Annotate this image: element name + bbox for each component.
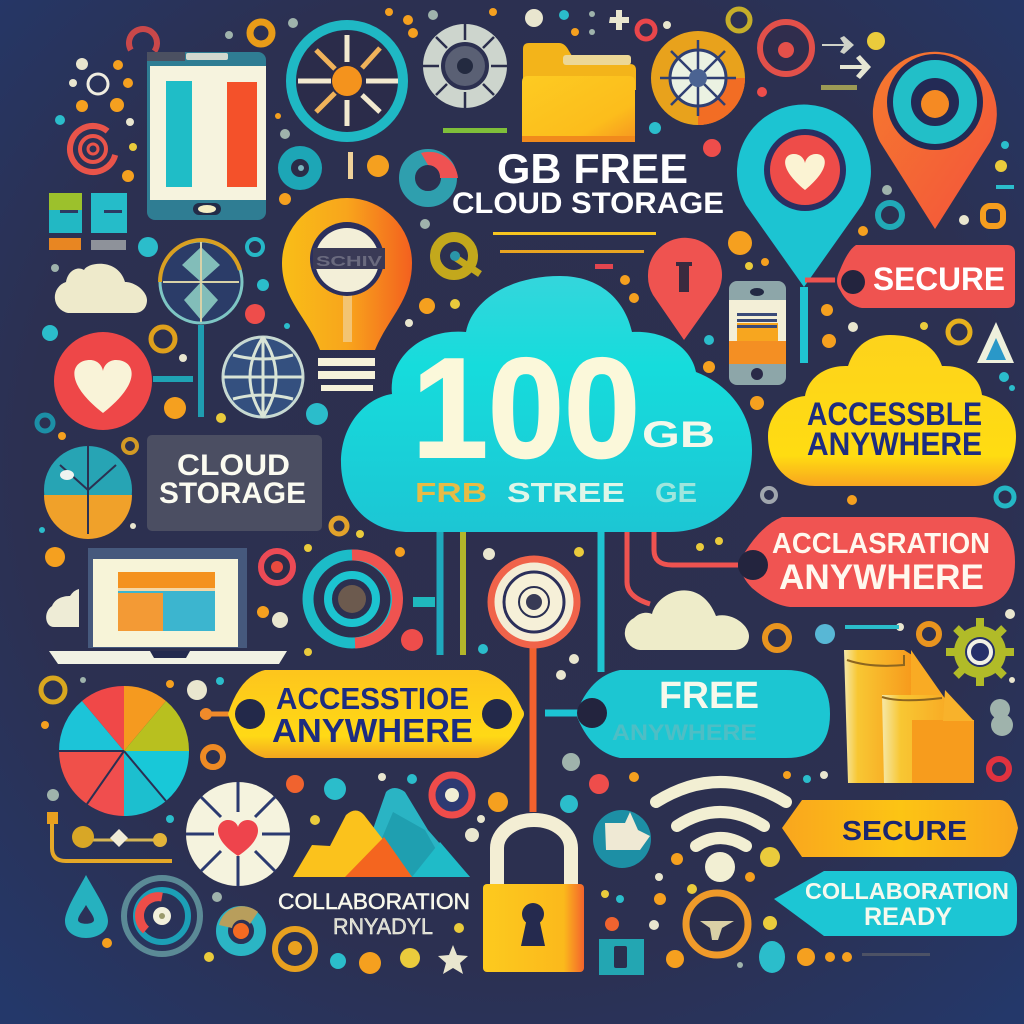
connector lines below main cloud (440, 530, 738, 812)
icon: tablet (147, 52, 266, 220)
icon: wheel globe on stem (160, 240, 242, 417)
main cloud: 100 GB free storage (341, 276, 752, 532)
heading (452, 145, 724, 220)
callout cloud: accessible anywhere: ANYWHERE (807, 426, 982, 462)
tag: collaboration ready: COLLABORATION (805, 878, 1009, 904)
icon: olive key (435, 237, 480, 275)
icon: mini pie ring (407, 152, 458, 199)
icon: red white target (491, 559, 577, 645)
icon: smartphone (729, 281, 786, 385)
icon: compass (660, 40, 736, 116)
main cloud: 100 GB free storage: FRB (415, 477, 487, 508)
icon: teal map pin with heart (737, 105, 871, 363)
icon: orange map pin (873, 52, 997, 229)
icon: spiral at-sign (65, 121, 121, 177)
main cloud: 100 GB free storage: GB (642, 414, 715, 455)
tag: accesstioe anywhere: ANYWHERE (272, 712, 473, 749)
tag: accesstioe anywhere (200, 670, 524, 758)
tag: free: FREE (659, 675, 759, 717)
main cloud: 100 GB free storage: STREE (507, 477, 625, 508)
icon: grey segmented wheel (423, 24, 507, 108)
text: collaboration rnyadyl (278, 889, 470, 939)
callout cloud: accessible anywhere (768, 335, 1016, 486)
icon: connector with nodes (47, 812, 172, 861)
icon: orange ring with dot (275, 929, 315, 969)
callout cloud: accessible anywhere: ACCESSBLE (807, 396, 982, 432)
icon: teal thumbs-up circle (593, 810, 651, 868)
icon: teal ring sun wheel (291, 25, 403, 137)
tag: secure red: SECURE (873, 261, 1005, 297)
tag: secure yellow: SECURE (842, 815, 967, 846)
icon: cream cloud left (55, 264, 147, 313)
icon: concentric ring (124, 878, 200, 954)
icon: cream cloud right (625, 590, 749, 650)
icon: teal red donut target (308, 555, 397, 643)
icon: orange badge ring (686, 893, 748, 955)
tag: collaboration ready: READY (864, 903, 952, 931)
tag: free: ANYWHERE (612, 720, 757, 745)
icon: tent triangle (977, 322, 1014, 363)
main cloud: 100 GB free storage: GE (655, 477, 697, 508)
icon: half cloud (46, 589, 79, 627)
tag: acclasration anywhere: ANYWHERE (779, 558, 984, 597)
icon: colour swatches (49, 193, 127, 250)
heading: GB FREE (497, 145, 688, 192)
icon: red ring small (432, 775, 472, 815)
tag: acclasration anywhere (738, 517, 1015, 607)
tag: collaboration ready (774, 871, 1017, 936)
heading: CLOUD STORAGE (452, 187, 724, 220)
icon: red map pin (648, 238, 722, 340)
icon: gear (946, 618, 1014, 686)
icon: mountains (293, 788, 470, 877)
small rings (37, 9, 1014, 779)
panel: cloud storage label: CLOUD (177, 449, 290, 482)
panel: cloud storage label: STORAGE (159, 477, 306, 510)
text: collaboration rnyadyl: COLLABORATION (278, 889, 470, 914)
icon: segment wheel (219, 906, 260, 950)
tag: secure red (805, 245, 1015, 308)
icon: teal orange pie dome (44, 446, 132, 539)
icon: teal light drop (65, 875, 108, 938)
icon: yellow folder (522, 43, 636, 142)
icon: globe (223, 337, 303, 417)
icon: heart circle (54, 332, 193, 430)
tag: acclasration anywhere: ACCLASRATION (772, 528, 990, 560)
icon: heart wheel (186, 782, 290, 886)
tag: secure yellow (782, 800, 1018, 857)
icon: small red ring (261, 551, 293, 583)
heading underlines (493, 232, 656, 253)
icon: pie chart (59, 686, 189, 816)
panel: cloud storage label (147, 435, 322, 531)
tag: free (545, 670, 830, 758)
icon: wifi (656, 782, 786, 882)
text: collaboration rnyadyl: RNYADYL (333, 914, 433, 939)
icon: padlock (483, 820, 584, 972)
tag: accesstioe anywhere: ACCESSTIOE (276, 681, 469, 716)
icon: light bulb (282, 198, 412, 391)
main cloud: 100 GB free storage: 100 (412, 329, 640, 488)
icon: laptop (49, 548, 287, 664)
icon: red target ring (760, 22, 812, 74)
icon: documents (844, 650, 974, 783)
icon: teal square with phone (599, 939, 644, 975)
icon: light bulb: SCHIV (316, 253, 382, 270)
icon: teal camera circle (278, 146, 322, 190)
